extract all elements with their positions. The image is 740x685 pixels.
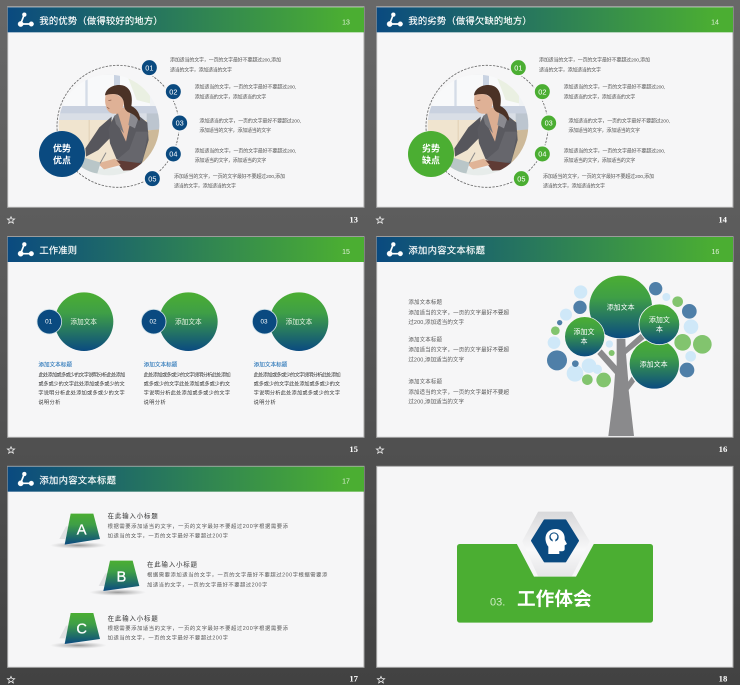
left text blocks: 过200,添加适当的文字 <box>408 318 465 326</box>
photo: woman at desk <box>426 73 532 177</box>
tree circle: right: 添加文 <box>649 315 670 324</box>
tree circle: right: 本 <box>656 324 663 333</box>
principle 01 <box>37 292 125 406</box>
tree circle: left: 添加文 <box>574 327 594 336</box>
principle 01: 此处添加或多或少的文字说明分析此处添加 <box>38 370 125 378</box>
principle 02: 或多或少的文字此处添加或多或少的文 <box>144 379 230 387</box>
photo: woman at desk <box>57 73 163 177</box>
item B: 加适当的文字，一页的文字最好不要超过200字 <box>147 580 267 588</box>
footer star <box>7 676 15 683</box>
tree circle: bottom: 添加文本 <box>640 359 668 368</box>
icon: head with light bulb <box>546 529 567 554</box>
footer number: 18 <box>719 674 728 684</box>
numbered items: 04 <box>169 150 177 159</box>
dashed ring <box>57 65 179 187</box>
item B: 根据需要添加适当的文字，一页的文字最好不要超过200字根据需要添 <box>147 571 328 579</box>
footer number: 17 <box>349 674 359 684</box>
principle 03: 03 <box>260 319 268 326</box>
item descriptions: 添加适当的文字，添加适当的文字 <box>195 93 266 100</box>
item C: 在此输入小标题 <box>108 613 158 622</box>
header page number: 17 <box>342 479 350 486</box>
item C: C <box>76 622 87 638</box>
item descriptions: 添加适当的文字，添加适当的文字 <box>564 93 635 100</box>
left text blocks: 添加文本标题 <box>408 378 443 386</box>
item A: A <box>77 522 87 538</box>
left text blocks: 添加适当的文字，一页的文字最好不要超 <box>408 388 510 396</box>
item descriptions: 添加适当的文字，一页的文字最好不要超过200, <box>199 117 301 124</box>
item A: 在此输入小标题 <box>108 511 158 520</box>
numbered items <box>510 59 557 187</box>
item descriptions: 添加适当的文字，一页的文字最好不要超过200, <box>564 147 665 154</box>
item descriptions: 添加适当的文字，一页的文字最好不要超过200,添加 <box>539 57 650 64</box>
tree circle: right <box>639 304 680 345</box>
section number: 03. <box>490 596 505 608</box>
badge: weaknesses: 劣势 <box>422 143 440 154</box>
item descriptions: 添加适当的文字，添加适当的文字 <box>564 157 635 164</box>
principle 03: 添加文本标题 <box>254 361 288 369</box>
item descriptions: 适当的文字，添加适当的文字 <box>539 66 601 73</box>
principle 01: 添加文本 <box>70 317 97 326</box>
green title card <box>457 544 653 623</box>
section title: 工作体会 <box>517 588 592 609</box>
hexagon notch <box>517 544 594 577</box>
item A: 根据需要添加适当的文字，一页的文字最好不要超过200字根据需要添 <box>108 522 289 530</box>
slide 14 heading: 我的劣势（做得欠缺的地方） <box>408 15 532 26</box>
slide 17: three items <box>7 466 364 684</box>
slide 13 header bar <box>8 7 364 32</box>
item descriptions: 添加适当的文字，一页的文字最好不要超过200,添加 <box>543 173 654 180</box>
item descriptions <box>170 57 301 190</box>
item descriptions: 添加适当的文字，一页的文字最好不要超过200, <box>195 147 296 154</box>
footer number: 14 <box>718 214 728 224</box>
footer star <box>376 447 384 453</box>
principle 02: 添加文本 <box>175 317 202 326</box>
footer number: 13 <box>349 214 359 224</box>
header page number: 16 <box>711 249 719 256</box>
principle 01: 说明分析 <box>38 398 60 406</box>
numbered items: 05 <box>517 174 525 183</box>
item C: 根据需要添加适当的文字，一页的文字最好不要超过200字根据需要添 <box>108 624 289 632</box>
item A: 加适当的文字，一页的文字最好不要超过200字 <box>108 532 228 540</box>
slide 14 header bar <box>377 7 733 32</box>
numbered items: 01 <box>145 63 153 72</box>
tree circle: left: 本 <box>580 337 587 346</box>
footer star <box>377 676 385 683</box>
principle 03: 添加文本 <box>286 317 313 326</box>
left text blocks <box>408 298 510 406</box>
principle 01: 或多或少的文字此处添加或多或少的文 <box>38 379 125 387</box>
slide 15: work principles <box>7 237 364 454</box>
principle 01: 添加文本标题 <box>38 361 72 369</box>
slide 16: tree diagram <box>376 237 733 454</box>
footer star <box>7 447 15 453</box>
slide 14: my weaknesses <box>376 7 733 224</box>
item descriptions: 添加适当的文字，添加适当的文字 <box>568 127 640 134</box>
badge: weaknesses: 缺点 <box>422 154 440 165</box>
item A <box>50 511 289 549</box>
slide 15 header bar <box>8 237 364 262</box>
icon: connected nodes <box>18 472 34 486</box>
tree foliage dots <box>547 282 712 387</box>
principle 02: 说明分析 <box>144 398 166 406</box>
numbered items: 03 <box>545 119 553 128</box>
header page number: 15 <box>342 249 350 256</box>
slide 13: my strengths <box>7 7 364 224</box>
dashed ring <box>426 65 548 187</box>
left text blocks: 添加文本标题 <box>408 298 443 306</box>
item C: 加适当的文字，一页的文字最好不要超过200字 <box>108 634 228 642</box>
principle 01: 字说明分析此处添加或多或少的文字 <box>38 389 125 397</box>
slide 14 panel <box>377 7 733 207</box>
slide 18 panel <box>377 466 733 667</box>
left text blocks: 添加适当的文字，一页的文字最好不要超 <box>408 346 510 354</box>
tree trunk <box>597 334 645 436</box>
item descriptions: 适当的文字，添加适当的文字 <box>174 183 236 190</box>
item descriptions: 添加适当的文字，一页的文字最好不要超过200, <box>195 84 296 91</box>
principle 03: 说明分析 <box>254 398 276 406</box>
left text blocks: 过200,添加适当的文字 <box>408 355 465 363</box>
footer number: 16 <box>719 444 728 454</box>
numbered items: 01 <box>514 63 522 72</box>
hexagon badge <box>523 513 589 575</box>
item descriptions: 添加适当的文字，一页的文字最好不要超过200,添加 <box>170 57 281 64</box>
principle 02 <box>141 292 231 406</box>
numbered items <box>141 59 188 187</box>
numbered items: 05 <box>148 174 156 183</box>
footer number: 15 <box>349 444 359 454</box>
principle 02: 字说明分析此处添加或多或少的文字 <box>144 389 230 397</box>
principle 02: 此处添加或多或少的文字说明分析此处添加 <box>144 370 231 378</box>
slide 16 heading: 添加内容文本标题 <box>408 245 485 256</box>
item B: 在此输入小标题 <box>147 560 198 569</box>
numbered items: 02 <box>169 87 177 96</box>
slide 13 panel <box>8 7 364 207</box>
item B: B <box>116 569 126 585</box>
badge: strengths: 优势 <box>53 143 71 154</box>
principle 03 <box>252 292 341 406</box>
inner blue hexagon <box>532 520 578 561</box>
numbered items: 03 <box>176 119 184 128</box>
icon: connected nodes <box>387 242 403 256</box>
item descriptions: 适当的文字，添加适当的文字 <box>170 66 232 73</box>
footer star <box>376 217 384 223</box>
badge: weaknesses <box>408 131 454 177</box>
tree circle: top <box>589 275 652 339</box>
principle 01: 01 <box>45 319 53 326</box>
slide 17 heading: 添加内容文本标题 <box>39 474 116 485</box>
tree circle: bottom <box>629 339 679 389</box>
item descriptions: 适当的文字，添加适当的文字 <box>543 183 605 190</box>
header page number: 14 <box>711 20 719 27</box>
principle 03: 字说明分析此处添加或多或少的文字 <box>254 389 340 397</box>
slide 16 panel <box>377 237 733 437</box>
item descriptions: 添加适当的文字，一页的文字最好不要超过200, <box>564 84 665 91</box>
icon: connected nodes <box>387 13 403 27</box>
item descriptions: 添加适当的文字，添加适当的文字 <box>199 127 271 134</box>
tree circle: top: 添加文本 <box>607 302 635 311</box>
slide 18: section divider <box>377 466 733 684</box>
item descriptions: 添加适当的文字，一页的文字最好不要超过200, <box>568 117 670 124</box>
slide 15 panel <box>8 237 364 437</box>
item B <box>89 560 328 596</box>
left text blocks: 添加适当的文字，一页的文字最好不要超 <box>408 308 510 316</box>
slide 16 header bar <box>377 237 733 262</box>
badge: strengths: 优点 <box>53 154 71 165</box>
slide 17 panel <box>8 466 364 667</box>
icon: connected nodes <box>18 242 34 256</box>
principle 02: 添加文本标题 <box>144 361 178 369</box>
icon: connected nodes <box>18 13 34 27</box>
badge: strengths <box>39 131 85 177</box>
left text blocks: 添加文本标题 <box>408 335 443 343</box>
item C <box>50 613 289 649</box>
item descriptions: 添加适当的文字，一页的文字最好不要超过200,添加 <box>174 173 285 180</box>
tree circle: left <box>565 317 605 357</box>
slide 17 header bar <box>8 467 364 492</box>
item descriptions: 添加适当的文字，添加适当的文字 <box>195 157 266 164</box>
numbered items: 04 <box>538 150 546 159</box>
principle 03: 或多或少的文字此处添加或多或少的文 <box>254 379 340 387</box>
principle 03: 此处添加或多或少的文字说明分析此处添加 <box>254 370 341 378</box>
left text blocks: 过200,添加适当的文字 <box>408 398 465 406</box>
footer star <box>7 217 15 223</box>
numbered items: 02 <box>538 87 546 96</box>
principle 02: 02 <box>149 319 157 326</box>
header page number: 13 <box>342 20 350 27</box>
slide 15 heading: 工作准则 <box>39 245 77 256</box>
item descriptions <box>539 57 670 190</box>
slide 13 heading: 我的优势（做得较好的地方） <box>39 15 163 26</box>
